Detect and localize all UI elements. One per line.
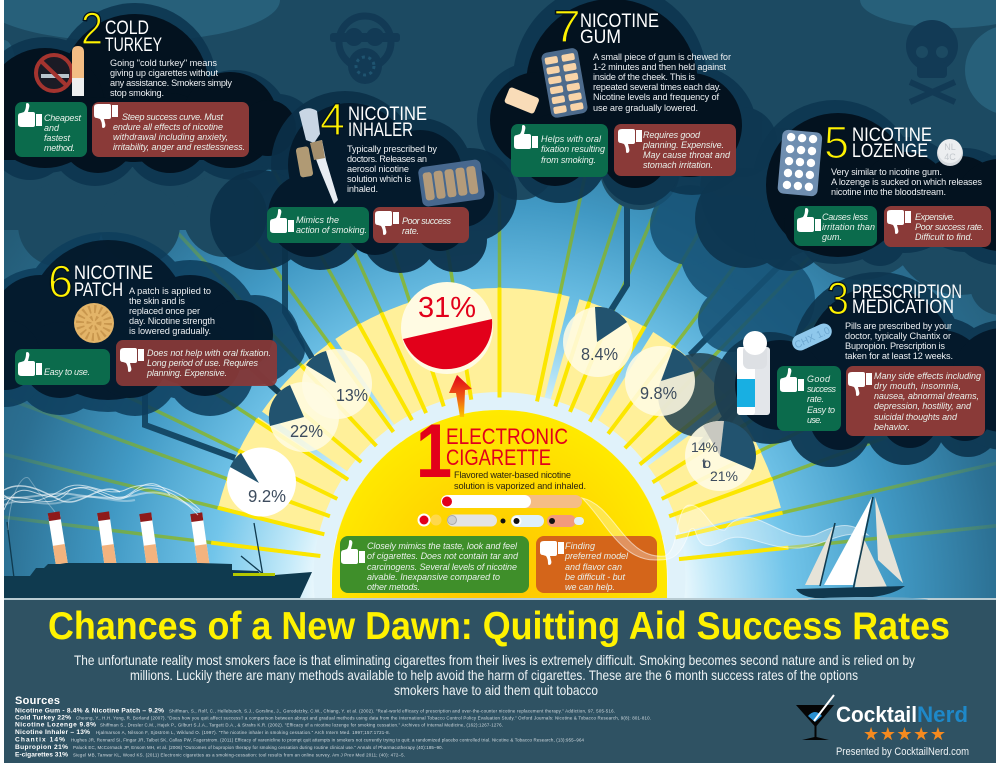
heading: MEDICATION [852, 296, 954, 318]
pie chart: cold turkey 22%: 22% [290, 421, 323, 441]
pro text: irritation than [822, 222, 875, 232]
cloud: prescription medication [735, 286, 1000, 450]
description: A patch is applied to [129, 286, 211, 296]
con text: Expensive. [915, 212, 955, 222]
thumb down [618, 129, 642, 153]
thumb up [341, 540, 365, 564]
pro text: of cigarettes. Does not contain tar and [367, 551, 519, 561]
sun petals: pale yellow sectors [218, 288, 781, 538]
pro text: from smoking. [541, 155, 596, 165]
icon: lozenge tablet: NL [944, 142, 956, 152]
con text: irritability, anger and restlessness. [113, 142, 245, 152]
sun disc [332, 410, 667, 598]
source: chantix: Hughes JR, Rennard SI, Fingar JR, Talbot SK, Callas PW, Fagerstrom. (2011) Efficacy of varenicline to prompt quit attempts in smokers not currently trying to quit: a randomized placebo controlled trial. Nicotine & Tobacco Research, (13):955–964 [71, 738, 585, 742]
pie chart: nicotine patch 9.2%: 9.2% [248, 486, 286, 506]
pie chart: e-cigarette 31%: 31% [418, 292, 476, 324]
heading: CIGARETTE [446, 445, 551, 470]
description: doctor, typically Chantix or [845, 331, 951, 341]
logo: presented by: Presented by CocktailNerd.com [836, 746, 969, 758]
description: repeated several times each day. [593, 82, 721, 92]
heading: COLD [105, 17, 149, 39]
thumb down [375, 211, 399, 235]
pie chart: cold turkey 22% [269, 382, 339, 452]
intro paragraph: smokers have to aid them quit tobacco [394, 683, 598, 698]
pro box [15, 102, 87, 157]
icon: patch [74, 303, 114, 343]
pro text: gum. [822, 232, 842, 242]
icon: gum blister [541, 47, 588, 119]
source: chantix [15, 736, 585, 744]
pro text: and [44, 123, 60, 133]
pro text: carcinogens. Several levels of nicotine [367, 562, 517, 572]
panel: illustrated scene [4, 0, 996, 598]
number 6: 6 [48, 256, 73, 307]
con text: preferred model [564, 551, 629, 561]
pro text: other metods. [367, 582, 420, 592]
description: A lozenge is sucked on which releases [831, 177, 982, 187]
pro box [15, 349, 110, 385]
con text: we can help. [565, 582, 615, 592]
con text: Poor success [402, 216, 452, 226]
source: lozenge [15, 722, 503, 728]
hull silhouette [4, 563, 312, 598]
cloud: nicotine gum [490, 0, 742, 188]
con text: planning. Expensive. [146, 368, 227, 378]
heading: PATCH [74, 279, 123, 301]
con text: suicidal thoughts and [874, 412, 958, 422]
sun ring [314, 392, 684, 598]
source: inhaler: Nicotine Inhaler – 13% [15, 729, 90, 736]
section: electronic cigarette [340, 409, 657, 593]
section: cold turkey [15, 3, 249, 157]
vapor swirl [582, 498, 868, 560]
description: solution which is [347, 174, 411, 184]
con text: stomach irritation. [643, 160, 713, 170]
number 2: 2 [81, 3, 103, 54]
con text: May cause throat and [643, 150, 731, 160]
pie chart: e-cigarette 31% [401, 282, 493, 374]
pro box [794, 206, 877, 246]
pie chart: prescription 14% to 21% [685, 421, 756, 491]
cloud lighter top patches [0, 0, 1000, 115]
sky background [4, 170, 996, 598]
number 3: 3 [827, 273, 849, 324]
cloud: nicotine patch halo [0, 232, 305, 416]
thumb down [94, 104, 118, 128]
icon: pill [790, 321, 834, 353]
pro text: fastest [44, 133, 70, 143]
description: Typically prescribed by [347, 144, 437, 154]
heading: NICOTINE [74, 262, 153, 284]
pro text: method. [44, 143, 75, 153]
section: prescription medication [737, 273, 985, 436]
description: day. Nicotine strength [129, 316, 215, 326]
description: Very similar to nicotine gum. [831, 167, 942, 177]
icon: no smoking [36, 46, 84, 96]
source: inhaler: Hjalmarson A, Nilsson F, Sjöström L, Wiklund O. (1997). "The nicotine inhaler in smoking cessation." Arch Intern Med. 1997;157:1721-8. [96, 730, 390, 735]
source: e-cigarettes: Siegel MB, Tanwar KL, Wood KS. (2011) Electronic cigarettes as a smoking-cessation: tool results from an online survey. Am J Prev Med 2011; (40): 472–5. [73, 752, 405, 758]
sources heading: Sources [15, 695, 60, 707]
icon: inhaler [295, 108, 338, 204]
description: aerosol nicotine [347, 164, 409, 174]
description: taken for at least 12 weeks. [845, 351, 953, 361]
footer panel [4, 600, 996, 763]
sun rays: outer olive [4, 193, 996, 560]
con text: nausea, abnormal dreams, [874, 391, 979, 401]
icon: lozenge tablet: 4C [944, 152, 956, 162]
section: nicotine patch [15, 256, 277, 386]
logo: wordmark: Cocktail [836, 702, 917, 727]
background clouds [4, 0, 1000, 315]
pro text: success [807, 384, 836, 394]
pie chart: prescription 14% to 21%: 14% [691, 439, 718, 455]
mast and rigging [7, 522, 263, 578]
cloud: nicotine lozenge [766, 113, 1000, 257]
icon: pill: CHX 1.0 [793, 325, 832, 351]
heading: NICOTINE [580, 10, 659, 32]
thumb down [120, 348, 144, 372]
pro box [777, 366, 841, 431]
pie chart: nicotine lozenge 9.8% [625, 346, 695, 416]
pro text: Closely mimics the taste, look and feel [367, 541, 518, 551]
cloud: cold turkey [0, 14, 296, 173]
con text: be difficult - but [565, 572, 625, 582]
source: lozenge: Shiffman S., Dresler C.M., Hajek P., Gilburt S.J.A., Targett D.A., & Strahs K.R. (2002). "Efficacy of a nicotine lozenge for smoking cessation." Archives of Internal Medicine, (162):1267-1276. [100, 722, 503, 728]
con text: Difficult to find. [915, 232, 973, 242]
heading: PRESCRIPTION [852, 281, 962, 303]
logo: martini glass [796, 695, 834, 740]
description: Pills are prescribed by your [845, 321, 952, 331]
con text: Steep success curve. Must [122, 112, 223, 122]
source: lozenge: Nicotine Lozenge 9.8% [15, 722, 96, 728]
sun rays: inner yellow [211, 288, 788, 559]
source: gum and patch [15, 708, 615, 714]
deck gap [233, 573, 275, 576]
description: Flavored water-based nicotine [454, 470, 571, 480]
sailboat [796, 497, 905, 598]
icon: lozenge blister [777, 129, 823, 197]
source: gum and patch: Nicotine Gum - 8.4% & Nicotine Patch – 9.2% [15, 708, 164, 714]
con text: endure all effects of nicotine [113, 122, 223, 132]
number 7: 7 [553, 1, 581, 52]
pie chart: nicotine inhaler 13%: 13% [336, 385, 368, 405]
pro text: aivable. Inexpansive compared to [367, 572, 500, 582]
con box [614, 124, 736, 176]
icon: lozenge tablet [937, 139, 963, 166]
con box [92, 102, 249, 157]
pie chart: nicotine inhaler 13% [302, 349, 372, 419]
cigarette funnels [48, 511, 210, 568]
connector pipes [145, 180, 790, 458]
thumb up [797, 208, 821, 232]
logo: rating stars: ★★★★★ [863, 724, 946, 745]
description: the skin and is [129, 296, 185, 306]
con text: Requires good [643, 130, 701, 140]
con text: rate. [402, 226, 419, 236]
con text: behavior. [874, 422, 910, 432]
pro text: use. [807, 415, 822, 425]
heading: LOZENGE [852, 140, 928, 162]
number 5: 5 [824, 117, 849, 168]
pro box [511, 124, 608, 177]
pro text: Helps with oral [541, 134, 602, 144]
heading: NICOTINE [348, 103, 427, 125]
pie chart: nicotine patch 9.2% [227, 448, 296, 516]
description: replaced once per [129, 306, 200, 316]
pro box [340, 536, 529, 593]
con text: planning. Expensive. [642, 140, 724, 150]
thumb down [540, 541, 564, 565]
description: Going "cold turkey" means [110, 58, 217, 68]
pie chart: nicotine gum 8.4% [563, 307, 633, 377]
thumb up [780, 368, 804, 392]
cloud: nicotine inhaler halo [210, 91, 517, 273]
e-cigarette assembled [441, 495, 582, 508]
pro text: Cheapest [44, 113, 81, 123]
pie chart: prescription 14% to 21%: to [702, 455, 711, 471]
con box [536, 536, 657, 593]
section: nicotine gum [504, 1, 736, 177]
logo: wordmark: Nerd [917, 702, 968, 727]
mid-tone cloud lobes [650, 185, 815, 352]
source: gum and patch: Shiffman, S., Rolf, C., Hellebusch, S.J., Gorsline, J., Gorodetzky, C.W., Chiang, Y. et al. (2002). "Real-world efficacy of prescription and over-the-counter nicotine replacement therapy." Addiction, 97, 505-516. [169, 708, 615, 714]
thumb up [18, 103, 42, 127]
description: use are gradually lowered. [593, 103, 698, 113]
pro box [267, 207, 369, 243]
cloud: prescription lobe [658, 353, 742, 437]
heading: ELECTRONIC [446, 424, 568, 449]
cloud: nicotine lozenge halo [695, 100, 1000, 271]
con box [884, 206, 991, 247]
ship with cigarette funnels [4, 511, 312, 598]
thumb up [514, 125, 538, 149]
intro paragraph: millions. Luckily there are many methods available to help avoid the harm of cigarettes. These are the 6 month success rates of the options [130, 668, 858, 683]
pro text: rate. [807, 394, 824, 404]
description: A small piece of gum is chewed for [593, 52, 731, 62]
description: any assistance. Smokers simply [110, 78, 232, 88]
con text: Long period of use. Requires [147, 358, 258, 368]
description: 1-2 minutes and then held against [593, 62, 726, 72]
description: inhaled. [347, 184, 378, 194]
cloud: nicotine gum halo [477, 0, 777, 205]
heading: NICOTINE [852, 124, 932, 146]
source: bupropion [15, 744, 443, 751]
arrow to 31% [449, 375, 472, 417]
description: giving up cigarettes without [110, 68, 218, 78]
con box [373, 207, 469, 243]
thumb down [848, 372, 872, 396]
number 1: 1 [416, 409, 452, 494]
icon: cartridge tray [418, 159, 485, 207]
con box [846, 366, 985, 436]
description: solution is vaporized and inhaled. [454, 481, 586, 491]
heading: INHALER [348, 119, 413, 141]
pro text: Easy to [807, 405, 835, 415]
e-cigarette parts [418, 514, 584, 527]
pie chart: nicotine lozenge 9.8%: 9.8% [640, 383, 677, 403]
description: inside of the cheek. This is [593, 72, 695, 82]
thumb up [270, 209, 294, 233]
pie chart: prescription 14% to 21%: 21% [710, 468, 738, 484]
source: bupropion: Bupropion 21% [15, 744, 68, 751]
con text: depression, hostility, and [874, 401, 972, 411]
section: nicotine inhaler [267, 94, 485, 243]
title: Chances of a New Dawn: Quitting Aid Success Rates [48, 605, 950, 648]
number 4: 4 [320, 94, 345, 145]
con text: withdrawal including anxiety, [113, 132, 228, 142]
source: cold turkey: Cheong, Y., H.H. Yong, R. Borland (2007). "Does how you quit affect success? a comparison between abrupt and gradual methods using data from the International Tobacco Control Policy Evaluation Study." Oxford Journals: Nicotine & Tobacco Research, 9(8): 801-810. [76, 716, 651, 720]
con text: Finding [565, 541, 595, 551]
cloud: nicotine patch [0, 240, 273, 400]
cloud: cold turkey halo [0, 3, 316, 186]
source: e-cigarettes [15, 752, 405, 758]
pro text: Causes less [822, 212, 868, 222]
description: Bupropion. Prescription is [845, 341, 945, 351]
pro text: Easy to use. [44, 367, 90, 377]
cloud: nicotine inhaler [268, 103, 494, 257]
gas mask icon [330, 16, 400, 84]
source: cold turkey: Cold Turkey 22% [15, 714, 71, 722]
description: doctors. Releases an [347, 154, 427, 164]
pie chart: nicotine gum 8.4%: 8.4% [581, 344, 618, 364]
source: inhaler [15, 729, 390, 736]
source: e-cigarettes: E-cigarettes 31% [15, 752, 68, 758]
con text: Poor success rate. [915, 222, 984, 232]
smoke from funnels [4, 477, 200, 530]
pro text: action of smoking. [296, 225, 367, 235]
description: Nicotine levels and frequency of [593, 92, 719, 102]
con text: Many side effects including [874, 371, 981, 381]
thumb down [887, 210, 911, 234]
source: chantix: Chantix 14% [15, 736, 65, 744]
water highlight [808, 597, 928, 603]
horizon line [4, 598, 996, 600]
source: bupropion: Paluck EC, McCormack JP, Ensom MH, et al. (2006) "Outcomes of bupropion therapy for smoking cessation during routine clinical use." Annals of Pharmacotherapy (40):185–90. [73, 745, 443, 750]
pro text: Good [807, 374, 831, 384]
heading: GUM [580, 26, 621, 48]
section: nicotine lozenge [777, 117, 991, 247]
thumb up [18, 352, 42, 376]
icon: medicine bottle [737, 331, 770, 415]
description: stop smoking. [110, 88, 164, 98]
pro text: fixation resulting [541, 144, 605, 154]
description: nicotine into the bloodstream. [831, 187, 946, 197]
cloud: prescription medication halo [714, 272, 1000, 467]
heading: TURKEY [105, 34, 162, 56]
source: cold turkey [15, 714, 651, 722]
con text: Does not help with oral fixation. [147, 348, 271, 358]
skull and crossbones icon [906, 20, 958, 102]
pro text: Mimics the [296, 215, 339, 225]
con box [116, 340, 277, 386]
con text: and flavor can [565, 562, 622, 572]
icon: gum piece [504, 87, 540, 114]
con text: dry mouth, insomnia, [874, 381, 961, 391]
description: is lowered gradually. [129, 326, 211, 336]
